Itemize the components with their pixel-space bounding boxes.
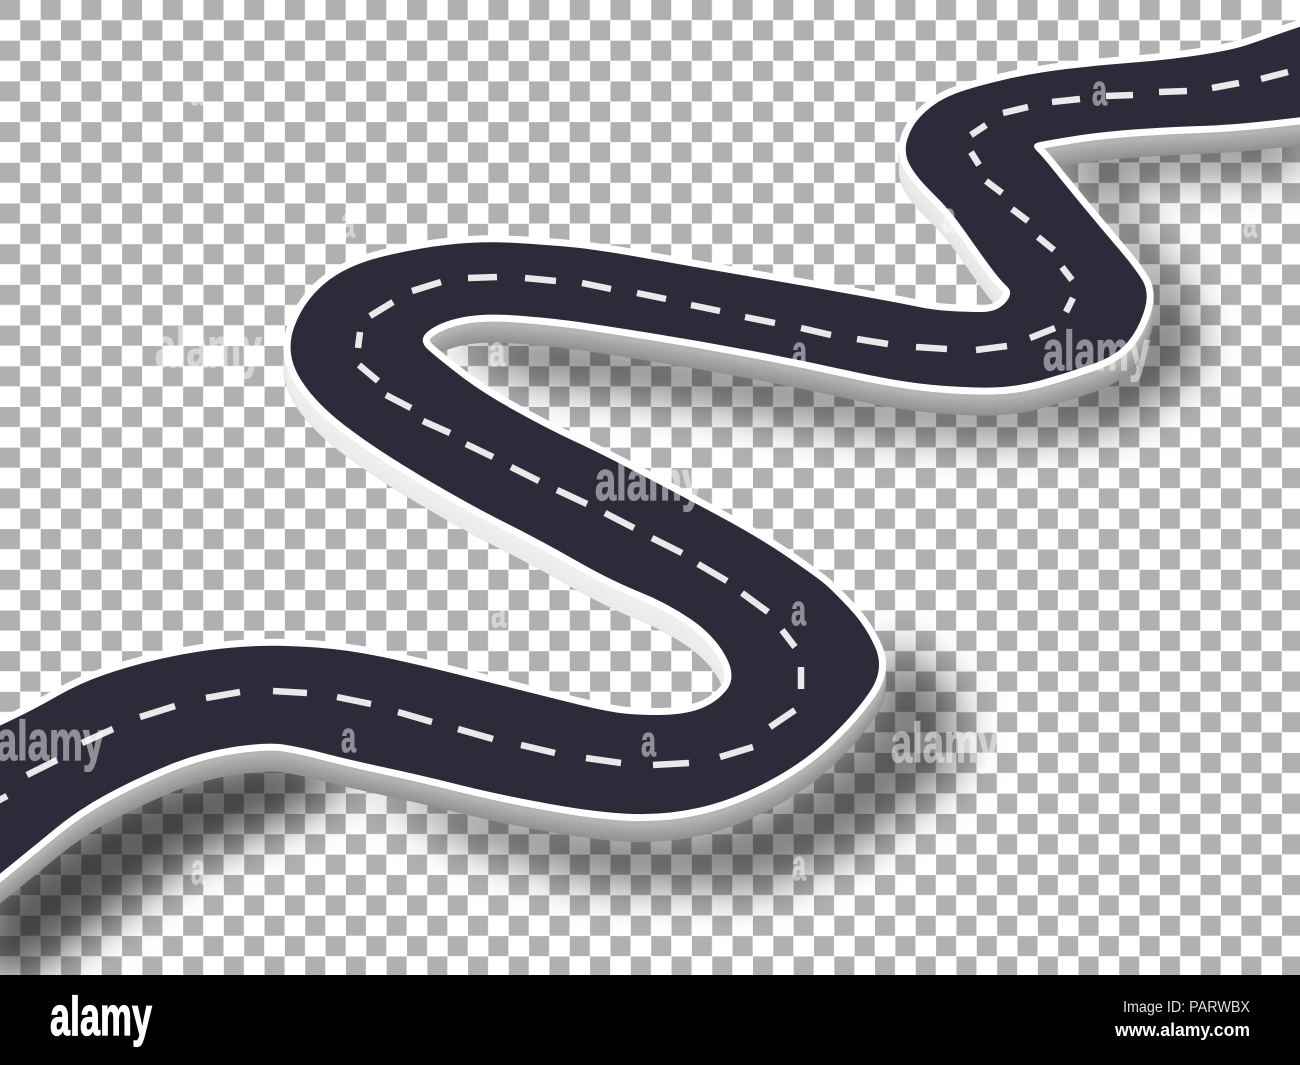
stock watermarks: a bbox=[641, 717, 656, 766]
stock watermarks: a bbox=[792, 327, 807, 376]
stock watermarks: a bbox=[190, 66, 204, 115]
stock watermarks bbox=[0, 66, 1257, 894]
dashed centre line bbox=[0, 72, 1288, 805]
stock watermarks: alamy bbox=[0, 709, 104, 772]
stock watermarks: a bbox=[791, 586, 806, 635]
image id: Image ID: PARWBX bbox=[1123, 999, 1250, 1016]
stock watermarks: a bbox=[1092, 66, 1107, 115]
stock watermarks: a bbox=[489, 327, 505, 376]
stock watermarks: a bbox=[942, 193, 956, 242]
stock watermarks: a bbox=[491, 588, 506, 637]
stock watermarks: a bbox=[341, 198, 355, 247]
stock watermarks: a bbox=[341, 713, 356, 762]
stock watermarks: alamy bbox=[155, 316, 262, 379]
stock watermarks: alamy bbox=[595, 449, 703, 512]
stock watermarks: a bbox=[191, 845, 205, 894]
stock watermarks: alamy bbox=[1043, 319, 1150, 382]
footer bar bbox=[0, 975, 1300, 1065]
stock watermarks: alamy bbox=[891, 711, 999, 774]
stock watermarks: a bbox=[1243, 198, 1257, 247]
website: www.alamy.com bbox=[1114, 1020, 1250, 1040]
footer logo: alamy bbox=[50, 985, 152, 1047]
stock watermarks: a bbox=[792, 841, 806, 890]
